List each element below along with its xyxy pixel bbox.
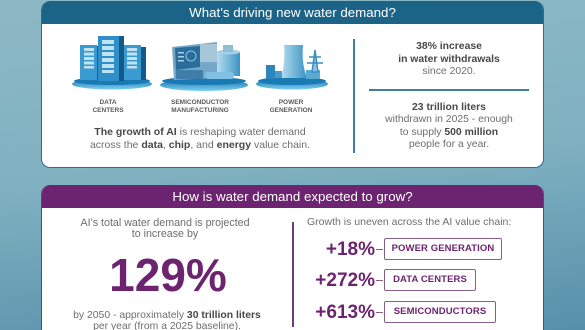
icon: power generation xyxy=(256,45,328,90)
label: power generation xyxy=(270,99,312,114)
icon: semiconductor manufacturing xyxy=(160,42,248,91)
stat: 23 trillion liters: 23 trillion liters xyxy=(412,102,486,113)
tag: power generation: POWER GENERATION xyxy=(392,243,494,254)
label: semiconductor manufacturing xyxy=(171,99,229,114)
stat: data centers xyxy=(315,269,476,291)
label: power generation: GENERATION xyxy=(270,106,312,114)
label: data centers: DATA xyxy=(99,99,117,106)
stat: 38% increase: 38% increase xyxy=(416,41,482,52)
big number: 129%: 129% xyxy=(109,249,227,301)
icon: data centers xyxy=(72,36,152,90)
text: growth of AI xyxy=(90,126,310,150)
text: projected increase: AI’s total water demand is projected xyxy=(80,217,250,229)
tag: data centers xyxy=(384,269,476,291)
label: data centers: CENTERS xyxy=(92,106,124,114)
label: data centers xyxy=(92,99,124,114)
text: growth of AI: across the data, chip, and energy value chain. xyxy=(90,138,310,150)
stat: 38% increase xyxy=(398,41,500,77)
panel: how is water demand expected to grow xyxy=(41,185,544,330)
value: +272%: +272% xyxy=(315,270,375,291)
text: growth of AI: The growth of AI is reshaping water demand xyxy=(94,126,306,138)
stat: 23 trillion liters xyxy=(385,102,513,150)
label: power generation: POWER xyxy=(279,99,303,106)
tag: power generation xyxy=(384,238,502,260)
heading: what's driving new water demand: What’s driving new water demand? xyxy=(189,5,396,20)
icons: data centers, semiconductor manufacturing, power generation xyxy=(72,36,328,91)
label: semiconductor manufacturing: MANUFACTURING xyxy=(171,106,229,114)
text: growth is uneven: Growth is uneven across the AI value chain: xyxy=(307,216,511,228)
stat: 23 trillion liters: people for a year. xyxy=(409,139,489,150)
value: +613%: +613% xyxy=(315,302,375,323)
stat: 38% increase: since 2020. xyxy=(422,66,476,77)
text: by 2050 xyxy=(73,310,261,330)
tag: data centers: DATA CENTERS xyxy=(393,274,467,285)
heading: what's driving new water demand xyxy=(41,1,544,24)
stat: 23 trillion liters: to supply 500 million xyxy=(400,127,498,138)
stat: 23 trillion liters: withdrawn in 2025 - enough xyxy=(385,114,513,125)
heading: how is water demand expected to grow xyxy=(41,185,544,208)
panel: what's driving new water demand xyxy=(41,1,544,168)
text: projected increase: to increase by xyxy=(132,228,198,240)
text: by 2050: by 2050 - approximately 30 trillion liters xyxy=(73,310,261,321)
text: projected increase xyxy=(80,217,250,240)
stat: 38% increase: in water withdrawals xyxy=(398,54,500,64)
vertical divider xyxy=(292,222,294,327)
vertical divider xyxy=(353,39,354,153)
stat: semiconductors xyxy=(315,301,496,323)
stat: power generation xyxy=(326,238,502,260)
horizontal divider xyxy=(369,89,529,90)
label: semiconductor manufacturing: SEMICONDUCTOR xyxy=(171,99,229,106)
value: +18%: +18% xyxy=(326,239,375,260)
heading: how is water demand expected to grow: How is water demand expected to grow? xyxy=(172,189,413,204)
tag: semiconductors: SEMICONDUCTORS xyxy=(394,306,486,317)
tag: semiconductors xyxy=(384,301,496,323)
